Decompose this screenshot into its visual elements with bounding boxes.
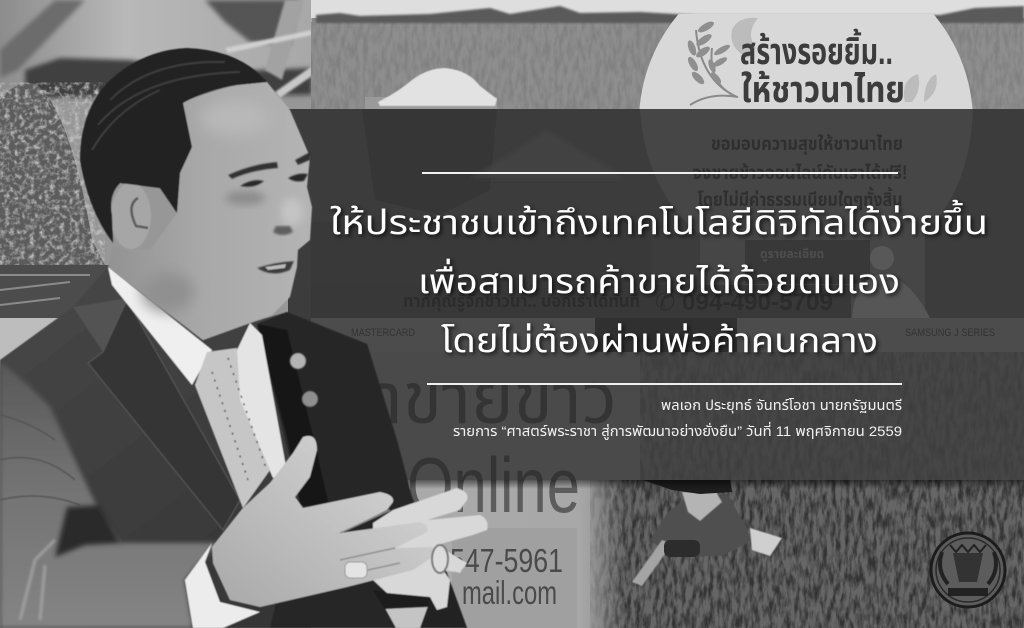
logo circle top section: ให้ชาวนาไทย xyxy=(741,69,905,110)
faded circle panel xyxy=(640,109,973,318)
mouth xyxy=(257,261,294,274)
faded rice sack xyxy=(362,109,497,215)
neck shadow xyxy=(142,272,194,312)
neck and face xyxy=(108,82,312,340)
shirt right side xyxy=(237,323,287,478)
faded large heading: นาขายข้าว xyxy=(330,359,617,439)
hair xyxy=(80,48,267,243)
light sleeve xyxy=(0,362,217,628)
faded rice sacks xyxy=(640,352,1024,480)
contact text: phone number: 547-5961 xyxy=(450,542,563,579)
quote text xyxy=(330,199,988,360)
faded button and portrait xyxy=(745,240,930,318)
portrait: man in suit xyxy=(0,48,488,628)
background photo: rice sheaf and sky xyxy=(0,0,312,368)
attribution text: พลเอก ประยุทธ์ จันทร์โอชา นายกรัฐมนตรี xyxy=(661,397,902,414)
contact text: email: mail.com xyxy=(462,574,557,611)
faded contact strip: ทากคุณรู้จักชาวนา.. บอกเราได้ทันที xyxy=(403,291,640,312)
far cuff xyxy=(385,606,428,628)
fingernail xyxy=(345,562,367,578)
near hand xyxy=(212,436,434,607)
torso of jacket xyxy=(0,267,467,628)
rice pile xyxy=(365,68,497,110)
lower band left area xyxy=(311,352,641,480)
icon: rice ear xyxy=(686,19,738,105)
far sleeve xyxy=(420,573,467,628)
wedding ring xyxy=(432,545,448,573)
dark translucent band xyxy=(288,109,1024,480)
far hand xyxy=(373,488,488,610)
nose highlight xyxy=(281,198,303,226)
far wrist band xyxy=(373,590,430,609)
left lapel xyxy=(88,300,240,530)
shirt collar xyxy=(108,267,212,385)
finger creases xyxy=(340,510,400,575)
faded circle text: จงขายข้าวออนไลน์กับเราได้ฟรี! xyxy=(692,162,908,184)
faded contact strip: ✆ 094-490-5709 xyxy=(655,289,833,316)
icon: government seal xyxy=(931,533,1005,607)
quote text: เพื่อสามารถค้าขายได้ด้วยตนเอง xyxy=(418,258,900,301)
right chest xyxy=(257,312,467,628)
sleeve creases xyxy=(0,415,80,505)
top rule xyxy=(422,172,898,174)
faded word Online inside band: Online xyxy=(407,441,580,529)
lower left light panel with contact text xyxy=(311,480,625,628)
eyebrows xyxy=(228,152,310,179)
attribution text xyxy=(453,397,902,440)
logo title: สร้างรอยยิ้ม.. xyxy=(740,28,893,72)
shirt cuff xyxy=(185,543,260,628)
quote marks xyxy=(731,18,758,58)
ear xyxy=(111,183,151,249)
logo circle top section xyxy=(640,14,972,109)
quote text: ให้ประชาชนเข้าถึงเทคโนโลยีดิจิทัลได้ง่ายขึ้น xyxy=(330,199,988,242)
faded tab row: MASTERCARD xyxy=(351,327,415,339)
forehead highlight xyxy=(201,100,269,136)
faded word Online below band: Online xyxy=(407,441,580,529)
faded circle text: ขอมอบความสุขให้ชาวนาไทย xyxy=(711,133,903,155)
under-eye shadow xyxy=(225,191,265,205)
bottom rule xyxy=(427,383,902,385)
elbow crease xyxy=(55,505,120,557)
eyes xyxy=(240,174,308,187)
faded tab row xyxy=(311,318,1024,352)
tie xyxy=(195,348,270,508)
shadow under band xyxy=(311,480,1024,489)
lapel pins xyxy=(290,353,306,369)
lower photo: rice field xyxy=(590,480,1024,628)
faded tab row: SAMSUNG J SERIES xyxy=(905,327,995,339)
right lapel xyxy=(257,324,330,510)
faded circle text xyxy=(692,133,908,211)
faded circle text: โดยไม่มีค่าธรรมเนียมใดๆทั้งสิ้น xyxy=(698,187,902,211)
jacket collar xyxy=(73,298,128,352)
background photo: rice field panel xyxy=(311,0,1024,112)
nostril xyxy=(273,226,293,235)
faded button and portrait: ดูรายละเอียด xyxy=(760,247,824,262)
photo: farmer in rice field xyxy=(632,480,782,586)
attribution text: รายการ “ศาสตร์พระราชา สู่การพัฒนาอย่างยั่งยืน” วันที่ 11 พฤศจิกายน 2559 xyxy=(453,421,902,440)
faded contact strip xyxy=(311,285,851,318)
quote text: โดยไม่ต้องผ่านพ่อค้าคนกลาง xyxy=(441,322,878,360)
